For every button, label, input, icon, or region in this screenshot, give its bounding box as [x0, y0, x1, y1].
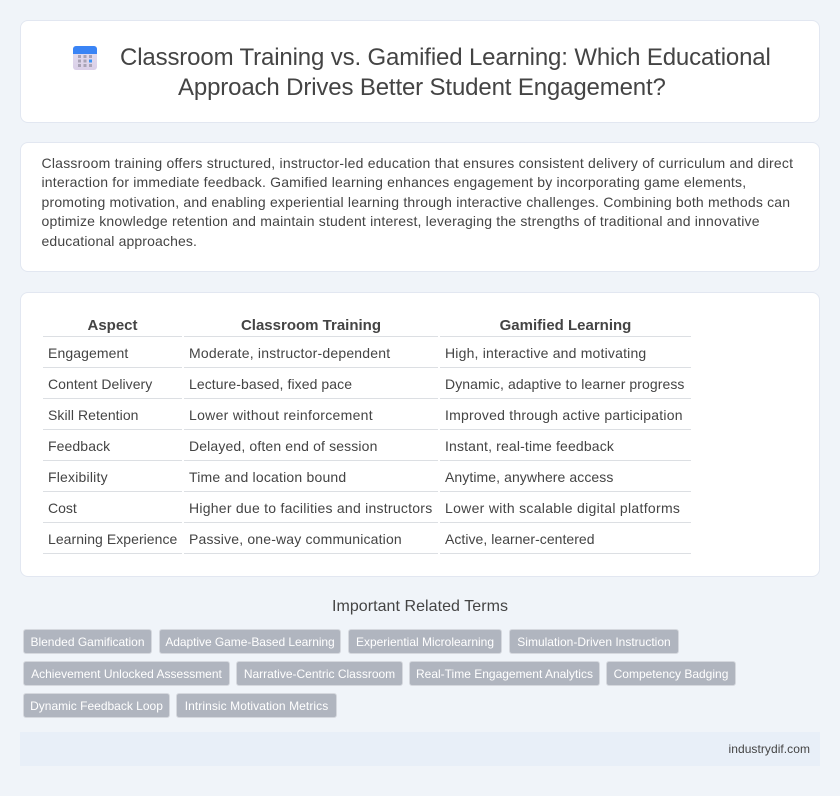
panel: description	[20, 142, 820, 272]
icon: calendar	[73, 46, 97, 70]
table: comparison: Skill Retention	[48, 407, 139, 423]
table: comparison: Engagement	[48, 345, 128, 361]
panel: header	[20, 20, 820, 123]
tag cloud: related terms: Real-Time Engagement Analytics	[416, 667, 593, 681]
description text: educational approaches.	[42, 233, 197, 249]
table: comparison: Flexibility	[48, 469, 108, 485]
tag cloud: related terms: Dynamic Feedback Loop	[30, 699, 163, 713]
title: Classroom Training vs. Gamified Learning: Which Educational	[120, 44, 771, 71]
table: comparison: Time and location bound	[189, 469, 346, 485]
table: comparison: Gamified Learning	[500, 317, 631, 334]
tag cloud: related terms: Achievement Unlocked Assessment	[31, 667, 222, 681]
description text	[42, 155, 793, 249]
tag cloud: related terms: Simulation-Driven Instruction	[517, 635, 671, 649]
tag cloud: related terms: Competency Badging	[614, 667, 728, 681]
title	[120, 44, 771, 101]
tag cloud: related terms: Blended Gamification	[30, 635, 145, 649]
title: Approach Drives Better Student Engagement?	[178, 74, 666, 101]
table: comparison: Lower without reinforcement	[189, 407, 373, 423]
description text: Classroom training offers structured, instructor-led education that ensures consistent delivery of curriculum and direct	[42, 155, 793, 171]
table: comparison	[43, 317, 691, 554]
footer: industrydif.com	[729, 742, 810, 756]
description text: optimize knowledge retention and maintain student interest, leveraging the strengths of traditional and innovative	[42, 213, 760, 229]
table: comparison: Content Delivery	[48, 376, 152, 392]
tag cloud: related terms: Narrative-Centric Classroom	[244, 667, 395, 681]
table: comparison: Lower with scalable digital platforms	[445, 500, 680, 516]
table: comparison: Classroom Training	[241, 317, 381, 334]
table: comparison: Learning Experience	[48, 531, 177, 547]
description text: promoting motivation, and enabling experiential learning through interactive challenges. Combining both methods can	[42, 194, 790, 210]
tag cloud: related terms: Intrinsic Motivation Metrics	[185, 699, 328, 713]
table: comparison: Dynamic, adaptive to learner progress	[445, 376, 685, 392]
tag cloud: related terms: Adaptive Game-Based Learning	[165, 635, 335, 649]
tag cloud: related terms: Experiential Microlearning	[356, 635, 494, 649]
table: comparison: Moderate, instructor-dependent	[189, 345, 390, 361]
footer	[20, 732, 820, 766]
table: comparison: Instant, real-time feedback	[445, 438, 614, 454]
table: comparison: High, interactive and motivating	[445, 345, 646, 361]
table: comparison: Lecture-based, fixed pace	[189, 376, 352, 392]
heading: related terms: Important Related Terms	[332, 598, 508, 615]
table: comparison: Passive, one-way communication	[189, 531, 402, 547]
table: comparison: Improved through active participation	[445, 407, 683, 423]
panel: comparison table	[20, 292, 820, 577]
table: comparison: Higher due to facilities and instructors	[189, 500, 432, 516]
table: comparison: Anytime, anywhere access	[445, 469, 613, 485]
tag cloud: related terms	[23, 629, 736, 718]
description text: interaction for immediate feedback. Gamified learning enhances engagement by incorporating game elements,	[42, 174, 746, 190]
table: comparison: Feedback	[48, 438, 110, 454]
table: comparison: Cost	[48, 500, 77, 516]
table: comparison: Active, learner-centered	[445, 531, 595, 547]
table: comparison: Aspect	[87, 317, 138, 334]
table: comparison: Delayed, often end of session	[189, 438, 378, 454]
